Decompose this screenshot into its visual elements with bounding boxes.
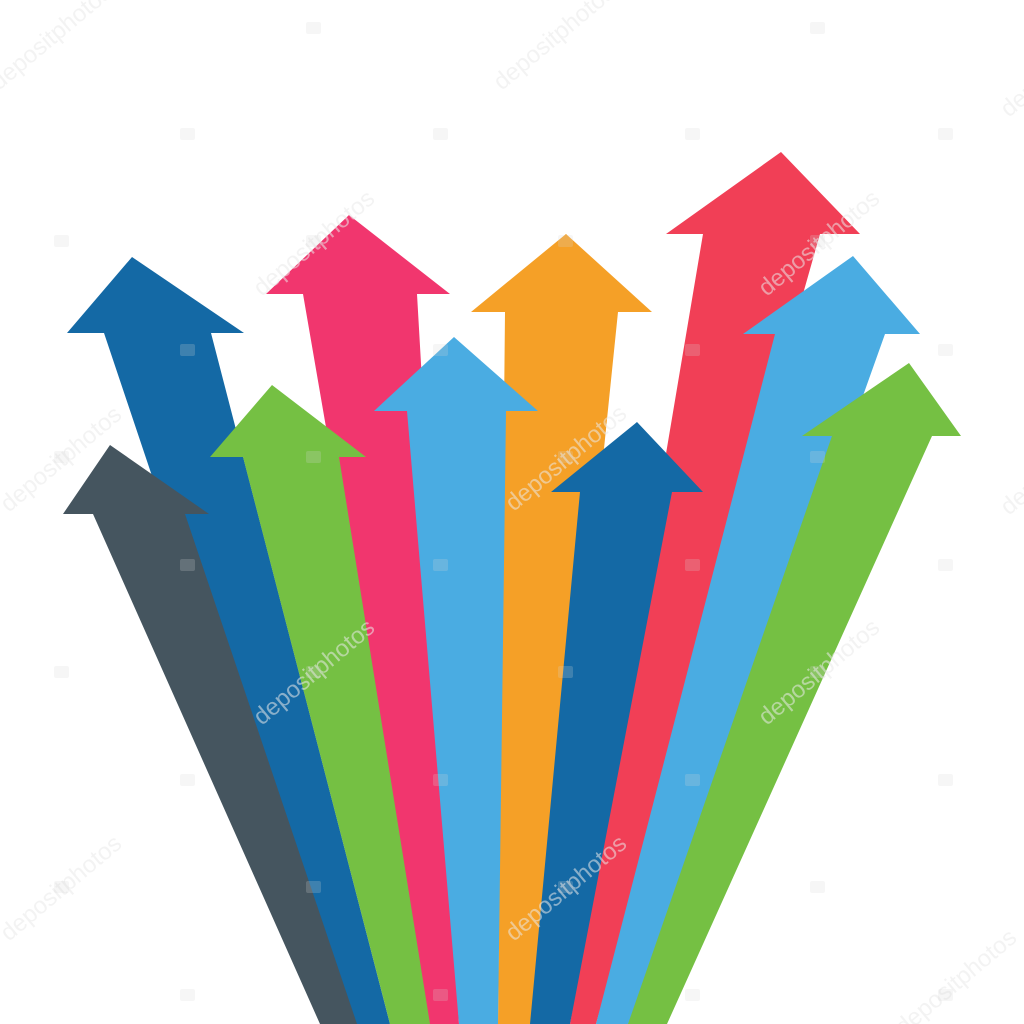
- watermark text: depositphotos: [500, 400, 632, 517]
- watermark text: depositphotos: [248, 614, 380, 731]
- arrow: dark blue left: [67, 257, 390, 1024]
- watermark text: depositphotos: [753, 185, 885, 302]
- arrow: green left: [210, 385, 430, 1024]
- watermark text: depositphotos: [248, 185, 380, 302]
- arrow: slate grey: [63, 445, 357, 1024]
- arrow: red: [570, 152, 860, 1024]
- watermark text: depositphotos: [500, 830, 632, 947]
- arrow: light blue center: [374, 337, 538, 1024]
- watermark text: depositphotos: [753, 614, 885, 731]
- arrow: orange: [471, 234, 652, 1024]
- arrow: pink: [266, 215, 459, 1024]
- arrow: light blue right: [596, 256, 920, 1024]
- arrow: dark blue center: [530, 422, 703, 1024]
- arrow: green right: [628, 363, 961, 1024]
